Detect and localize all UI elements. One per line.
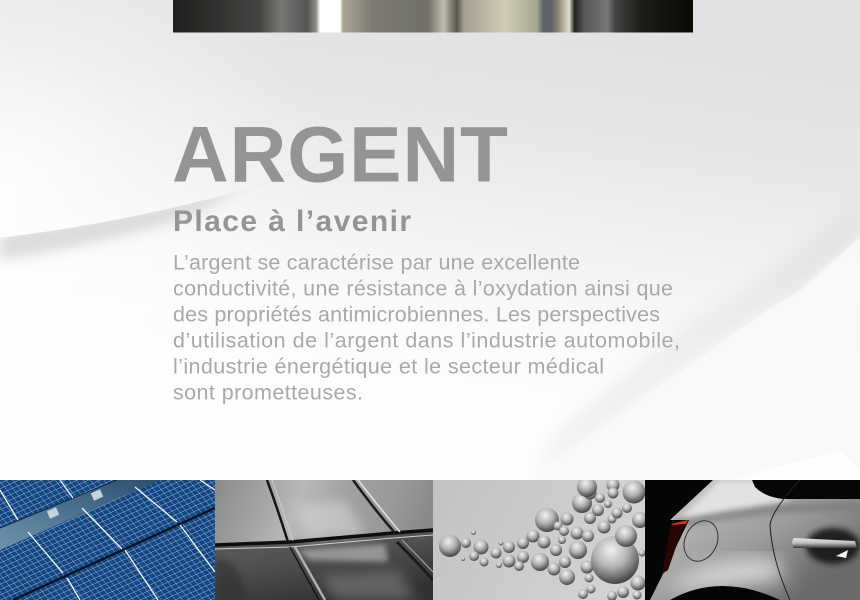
- body text: L’argent se caractérise par une excellente: [173, 250, 580, 274]
- photo: silver spheres: [433, 477, 648, 600]
- photo: silver car: [645, 480, 860, 600]
- body text: des propriétés antimicrobiennes. Les perspectives: [173, 302, 660, 326]
- body text: [173, 250, 680, 404]
- photo: metal tiles: [215, 480, 433, 600]
- body text: sont prometteuses.: [173, 380, 363, 404]
- top metallic image strip: [173, 0, 693, 32]
- body text: d’utilisation de l’argent dans l’industrie automobile,: [173, 328, 680, 352]
- title: ARGENT: [172, 110, 508, 198]
- photo: solar panels: [0, 480, 215, 600]
- body text: l’industrie énergétique et le secteur médical: [173, 354, 604, 378]
- body text: conductivité, une résistance à l’oxydation ainsi que: [173, 276, 673, 300]
- subtitle: Place à l’avenir: [173, 205, 411, 238]
